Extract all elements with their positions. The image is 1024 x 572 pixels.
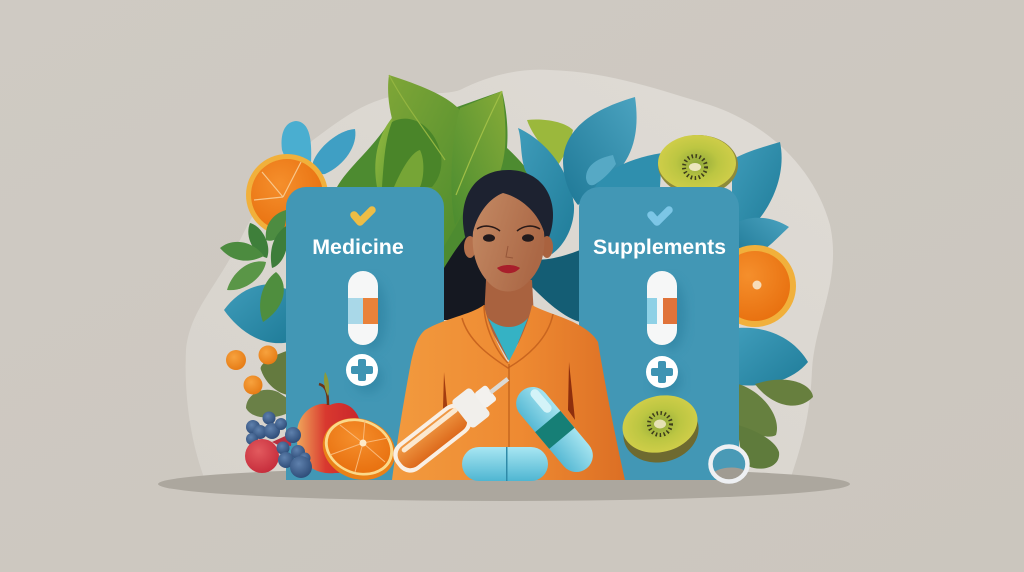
hair cap <box>463 170 553 248</box>
icon: plus circle <box>346 354 378 386</box>
panel: medicine <box>286 187 444 480</box>
heading: supplements: Supplements <box>593 236 726 259</box>
capsule horizontal <box>462 447 548 481</box>
eyes and brows <box>477 226 540 242</box>
apple <box>297 372 361 473</box>
orange slice right <box>714 245 796 327</box>
blue petals top left <box>282 121 355 174</box>
glass ring <box>710 446 748 482</box>
orange half front <box>314 408 404 490</box>
ground shadow ellipse <box>158 467 850 501</box>
olive leaves left <box>246 350 290 418</box>
panel: supplements <box>579 187 739 480</box>
icon: plus circle <box>646 356 678 388</box>
orange berries <box>226 346 278 394</box>
icon: blue check <box>651 210 669 222</box>
mint sprig <box>220 210 288 322</box>
kiwi top <box>658 135 738 195</box>
lips <box>497 265 520 273</box>
heading: medicine: Medicine <box>312 235 404 259</box>
teal leaves cluster <box>518 97 808 386</box>
shirt <box>488 318 528 363</box>
face <box>473 193 544 292</box>
neck <box>484 280 534 360</box>
hair back <box>444 225 500 320</box>
green leaves cluster <box>337 75 535 270</box>
olive leaves right <box>738 380 813 469</box>
kiwi half <box>616 388 705 470</box>
person <box>392 170 625 480</box>
orange slice top left <box>246 154 328 236</box>
ears <box>464 236 476 258</box>
syringe <box>387 365 519 479</box>
icon: capsule <box>348 271 378 345</box>
capsule diagonal <box>509 380 600 479</box>
nose <box>506 246 513 258</box>
paper blob backdrop <box>186 70 833 480</box>
berries <box>245 412 312 478</box>
teal leaf left <box>224 284 290 343</box>
jacket <box>392 305 625 480</box>
icon: capsule <box>647 271 677 345</box>
icon: yellow check <box>354 210 372 222</box>
